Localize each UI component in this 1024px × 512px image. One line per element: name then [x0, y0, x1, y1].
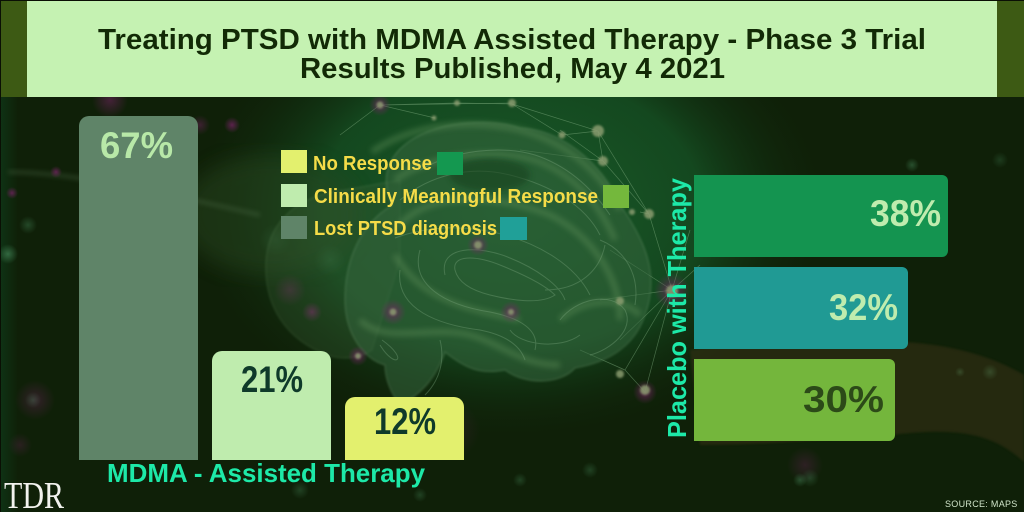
legend row: no response [281, 150, 463, 175]
bar: clinically meaningful response 21%: 21% [241, 359, 303, 400]
bar: no response 12%: 12% [374, 401, 436, 442]
bar: no response 12% [345, 397, 464, 460]
bar chart: placebo with therapy [662, 175, 948, 441]
legend row: lost PTSD diagnosis: Lost PTSD diagnosis [314, 218, 497, 240]
bar chart: MDMA-assisted therapy [79, 116, 464, 488]
bar: clinically meaningful response 30% [694, 359, 895, 441]
source note: SOURCE: MAPS [945, 499, 1018, 509]
bar: clinically meaningful response 21% [212, 351, 331, 460]
bar: clinically meaningful response 30%: 30% [803, 379, 884, 420]
bar: no response 38% [694, 175, 948, 257]
bar: no response 38%: 38% [870, 193, 941, 234]
axis label: MDMA - Assisted Therapy: MDMA - Assisted Therapy [107, 458, 426, 488]
title: Treating PTSD with MDMA Assisted Therapy - Phase 3 Trial [98, 24, 926, 56]
title: Results Published, May 4 2021 [300, 53, 725, 85]
bar: lost PTSD diagnosis 67%: 67% [100, 125, 173, 166]
axis label: Placebo with Therapy: Placebo with Therapy [662, 177, 692, 438]
bar: lost PTSD diagnosis 32% [694, 267, 908, 349]
icon: brain illustration with neural network [266, 94, 700, 405]
legend row: clinically meaningful response: Clinically Meaningful Response [314, 186, 598, 208]
legend row: no response: No Response [313, 153, 432, 175]
bar: lost PTSD diagnosis 67% [79, 116, 198, 460]
bar: lost PTSD diagnosis 32%: 32% [829, 287, 898, 328]
legend [281, 150, 629, 240]
title [98, 24, 926, 85]
